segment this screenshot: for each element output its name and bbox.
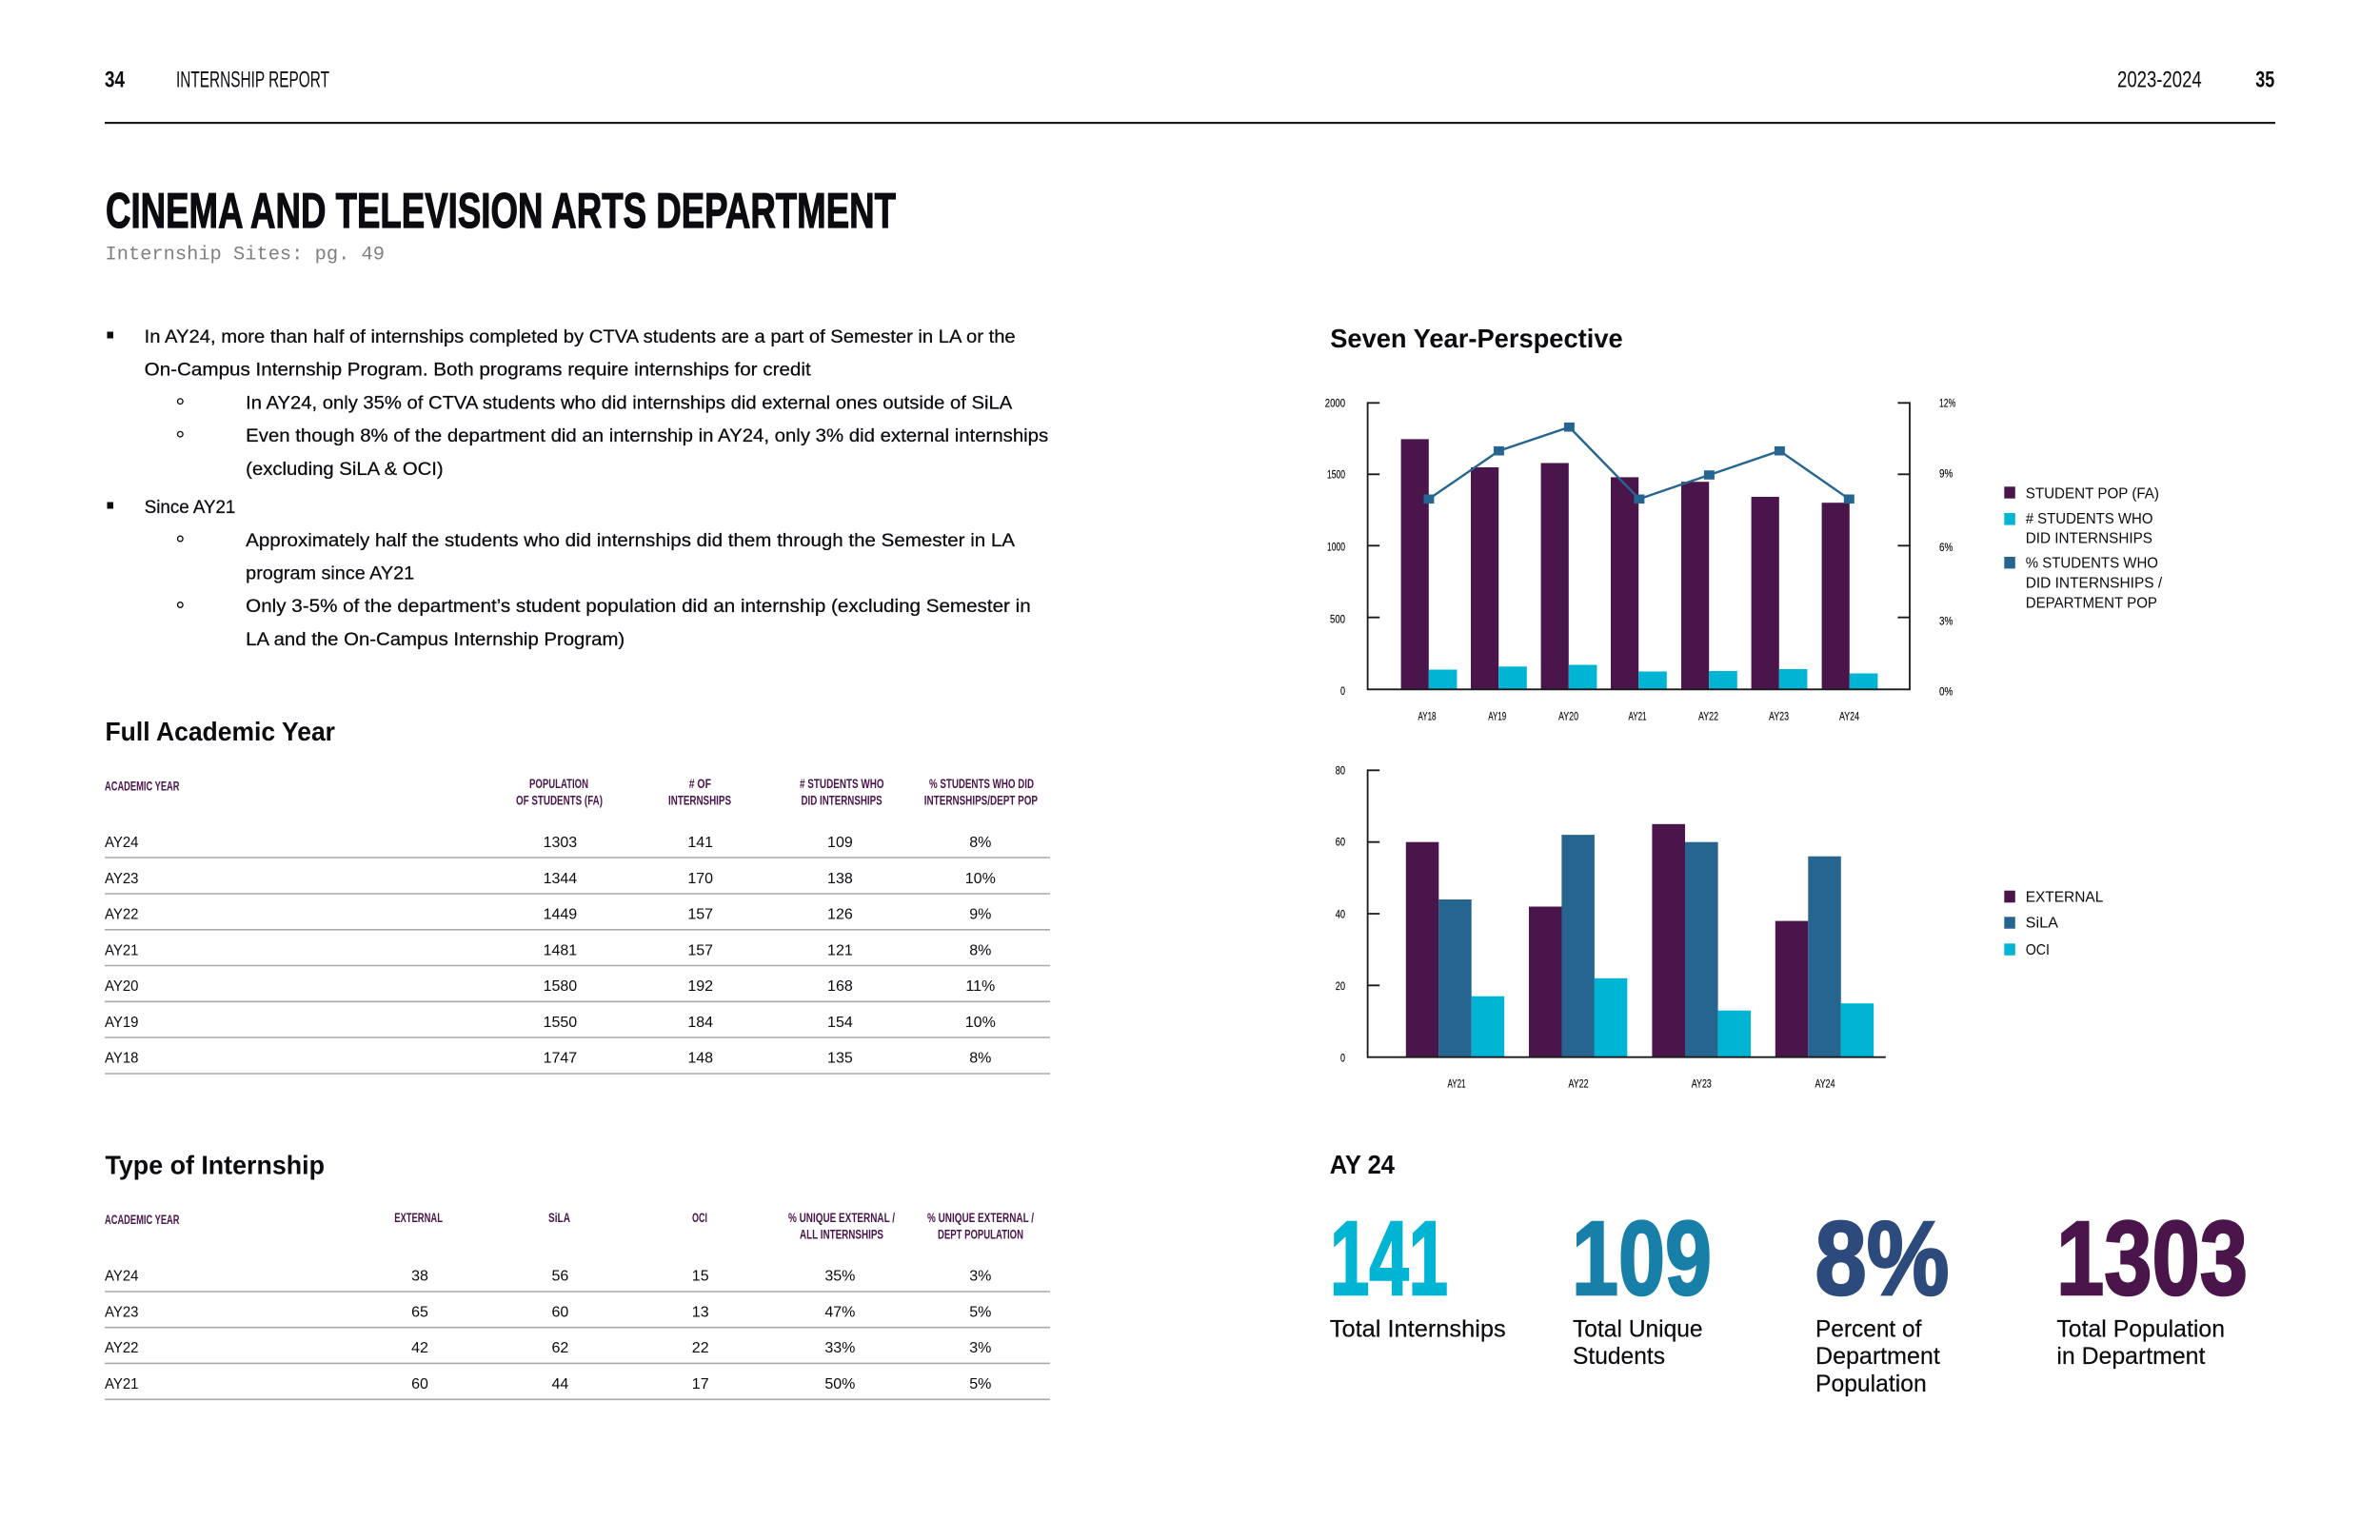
table: type of internship: 3% — [969, 1269, 991, 1285]
table: type of internship: 50% — [824, 1376, 855, 1392]
x axis labels: AY20 — [1558, 712, 1578, 723]
stat: total population in department: 1303 — [2056, 1200, 2248, 1317]
table: full academic year: 168 — [827, 978, 853, 995]
table: full academic year: 8% — [969, 942, 991, 958]
axes — [1368, 403, 1910, 689]
table: type of internship: 33% — [824, 1340, 855, 1356]
y axis labels: 40 — [1336, 909, 1345, 920]
left axis labels: 500 — [1330, 614, 1345, 625]
table: type of internship: % UNIQUE EXTERNAL / — [788, 1211, 895, 1225]
table: full academic year: AY21 — [105, 942, 139, 958]
table: full academic year: 157 — [687, 907, 713, 923]
table: type of internship: 56 — [552, 1269, 568, 1285]
line: percent of students — [1423, 423, 1854, 503]
heading: full academic year: Full Academic Year — [105, 717, 335, 746]
table: full academic year: # STUDENTS WHO — [800, 777, 884, 791]
table: type of internship: EXTERNAL — [394, 1211, 443, 1225]
left axis labels — [1325, 398, 1345, 698]
table: full academic year: OF STUDENTS (FA) — [516, 793, 603, 807]
table: full academic year: 141 — [687, 835, 713, 851]
bullet list: (excluding SiLA & OCI) — [246, 459, 444, 480]
table: type of internship: 22 — [692, 1340, 709, 1356]
subtitle: Internship Sites: pg. 49 — [105, 244, 385, 267]
y axis labels: 80 — [1336, 765, 1345, 777]
legend: seven year chart: % STUDENTS WHO — [2026, 556, 2158, 572]
legend: internship type chart: OCI — [2026, 942, 2050, 958]
table: full academic year: INTERNSHIPS — [668, 793, 731, 807]
table: full academic year: 9% — [969, 907, 991, 923]
table: type of internship: 60 — [552, 1304, 568, 1320]
table: type of internship: OCI — [692, 1211, 707, 1225]
right axis labels: 12% — [1939, 398, 1955, 409]
stat: total unique students: Students — [1573, 1343, 1665, 1370]
legend: internship type chart: EXTERNAL — [2026, 890, 2103, 906]
legend: seven year chart: DID INTERNSHIPS / — [2026, 575, 2163, 591]
table: full academic year: 1344 — [544, 871, 577, 887]
header right — [2117, 67, 2274, 93]
table: full academic year: AY20 — [105, 978, 139, 995]
y axis labels: 20 — [1336, 981, 1345, 993]
table: type of internship: SiLA — [548, 1211, 570, 1225]
table: full academic year: 184 — [687, 1015, 713, 1031]
table: type of internship: AY24 — [105, 1269, 139, 1285]
x axis labels: AY18 — [1418, 712, 1436, 723]
x axis labels: AY23 — [1769, 712, 1789, 723]
y axis labels: 60 — [1336, 838, 1345, 849]
axes — [1368, 770, 1886, 1057]
heading: seven year perspective: Seven Year-Perspective — [1330, 324, 1623, 353]
table: full academic year: 126 — [827, 907, 853, 923]
table: type of internship: ACADEMIC YEAR — [105, 1213, 180, 1227]
bars: OCI — [1472, 978, 1874, 1057]
y axis labels: 0 — [1340, 1054, 1345, 1065]
table: type of internship: 47% — [824, 1304, 855, 1320]
header right: 35 — [2255, 67, 2274, 93]
legend: seven year chart: DID INTERNSHIPS — [2026, 530, 2152, 546]
table: type of internship: AY22 — [105, 1340, 139, 1356]
header left — [105, 67, 329, 93]
table: type of internship: 3% — [969, 1340, 991, 1356]
table: full academic year: 10% — [965, 1015, 996, 1031]
table: full academic year: AY23 — [105, 871, 139, 887]
stat: total population in department — [2056, 1200, 2248, 1370]
legend: seven year chart: # STUDENTS WHO — [2026, 511, 2153, 527]
chart: seven year bars and line — [1325, 398, 1955, 723]
left axis labels: 0 — [1340, 686, 1345, 698]
table: full academic year: 109 — [827, 835, 853, 851]
bullet list: Approximately half the students who did internships did them through the Semester in LA — [246, 530, 1015, 551]
bullet list: program since AY21 — [246, 563, 414, 584]
table: full academic year: 10% — [965, 871, 996, 887]
table: type of internship: % UNIQUE EXTERNAL / — [927, 1211, 1034, 1225]
bullet list: Since AY21 — [145, 497, 235, 518]
table: type of internship: DEPT POPULATION — [938, 1228, 1023, 1241]
table: type of internship: 5% — [969, 1376, 991, 1392]
right axis labels: 9% — [1939, 468, 1953, 480]
table: full academic year: AY19 — [105, 1015, 139, 1031]
x axis labels: AY19 — [1488, 712, 1506, 723]
table: full academic year: 1481 — [544, 942, 577, 958]
table: type of internship: 17 — [692, 1376, 709, 1392]
bullet list — [107, 326, 1048, 650]
bullet list: Only 3-5% of the department’s student population did an internship (excluding Semester in — [246, 596, 1031, 617]
x axis labels — [1418, 712, 1859, 723]
legend: seven year chart: STUDENT POP (FA) — [2026, 485, 2159, 502]
stat: percent of department population: Department — [1815, 1343, 1940, 1370]
left axis labels: 1500 — [1327, 470, 1345, 482]
table: full academic year: AY22 — [105, 907, 139, 923]
table: type of internship: 5% — [969, 1304, 991, 1320]
bullet list: Even though 8% of the department did an internship in AY24, only 3% did external internships — [246, 425, 1048, 446]
table: type of internship: 35% — [824, 1269, 855, 1285]
table: type of internship: AY23 — [105, 1304, 139, 1320]
heading: type of internship: Type of Internship — [105, 1150, 325, 1180]
left axis labels: 2000 — [1325, 398, 1345, 409]
stat: total unique students — [1572, 1200, 1712, 1370]
table: full academic year: 170 — [687, 871, 713, 887]
legend: seven year chart — [2004, 485, 2163, 611]
table: full academic year: AY18 — [105, 1051, 139, 1067]
table: type of internship: AY21 — [105, 1376, 139, 1392]
x axis labels: AY24 — [1839, 712, 1859, 723]
table: full academic year: 192 — [687, 978, 713, 995]
stat: total internships: Total Internships — [1330, 1315, 1506, 1342]
table: full academic year: 138 — [827, 871, 853, 887]
right axis labels: 3% — [1939, 617, 1953, 628]
table: full academic year: AY24 — [105, 835, 139, 851]
stat: percent of department population: 8% — [1815, 1200, 1950, 1317]
table: full academic year: 157 — [687, 942, 713, 958]
table: full academic year: 8% — [969, 1051, 991, 1067]
table: full academic year: 1449 — [544, 907, 577, 923]
table: full academic year: 1580 — [544, 978, 577, 995]
chart: internship type bars — [1336, 765, 1886, 1090]
table: full academic year: 11% — [965, 978, 995, 995]
table: type of internship: 60 — [411, 1376, 428, 1392]
stat: total population in department: in Department — [2056, 1343, 2205, 1370]
table: type of internship: 13 — [692, 1304, 709, 1320]
table: full academic year — [105, 777, 1050, 1074]
bars: SiLA — [1438, 835, 1841, 1057]
legend: internship type chart: SiLA — [2026, 915, 2058, 931]
table: full academic year: 1550 — [544, 1015, 577, 1031]
stat: percent of department population: Percent of — [1815, 1315, 1921, 1342]
bars: external — [1406, 824, 1808, 1057]
table: full academic year: 8% — [969, 835, 991, 851]
left axis labels: 1000 — [1327, 542, 1345, 553]
table: full academic year: INTERNSHIPS/DEPT POP — [924, 793, 1038, 807]
stat: percent of department population — [1815, 1200, 1950, 1397]
bullet list: In AY24, more than half of internships completed by CTVA students are a part of Semester in LA or the — [145, 326, 1016, 347]
title: CINEMA AND TELEVISION ARTS DEPARTMENT — [106, 183, 896, 238]
x axis labels: AY24 — [1815, 1078, 1835, 1090]
table: full academic year: 121 — [827, 942, 853, 958]
x axis labels: AY22 — [1569, 1078, 1588, 1090]
table: full academic year: DID INTERNSHIPS — [802, 793, 883, 807]
stat: total population in department: Total Population — [2056, 1315, 2225, 1342]
table: full academic year: 148 — [687, 1051, 713, 1067]
header left: INTERNSHIP REPORT — [176, 67, 329, 93]
y axis labels — [1336, 765, 1345, 1065]
x axis labels: AY23 — [1692, 1078, 1712, 1090]
table: type of internship: 42 — [411, 1340, 428, 1356]
table: type of internship: 44 — [552, 1376, 568, 1392]
table: full academic year: ACADEMIC YEAR — [105, 779, 180, 793]
bullet list: In AY24, only 35% of CTVA students who did internships did external ones outside of SiLA — [246, 392, 1012, 413]
stat: total unique students: 109 — [1572, 1200, 1712, 1317]
x axis labels — [1447, 1078, 1835, 1090]
x axis labels: AY21 — [1447, 1078, 1466, 1090]
table: full academic year: 154 — [827, 1015, 853, 1031]
legend: internship type chart — [2004, 890, 2103, 958]
right axis labels: 0% — [1939, 687, 1953, 699]
table: type of internship: 15 — [692, 1269, 709, 1285]
header left: 34 — [105, 67, 126, 93]
x axis labels: AY21 — [1628, 712, 1647, 723]
table: type of internship: 62 — [552, 1340, 568, 1356]
bars: students who did internships — [1429, 664, 1877, 689]
table: full academic year: # OF — [689, 777, 711, 791]
stat: total internships: 141 — [1330, 1200, 1448, 1317]
header right: 2023-2024 — [2117, 67, 2202, 93]
table: type of internship — [105, 1211, 1050, 1399]
table: full academic year: % STUDENTS WHO DID — [929, 777, 1034, 791]
table: full academic year: 1303 — [544, 835, 577, 851]
x axis labels: AY22 — [1698, 712, 1718, 723]
table: type of internship: 38 — [411, 1269, 428, 1285]
table: full academic year: 135 — [827, 1051, 853, 1067]
table: type of internship: 65 — [411, 1304, 428, 1320]
table: full academic year: 1747 — [544, 1051, 577, 1067]
stat: percent of department population: Population — [1815, 1371, 1927, 1397]
heading: AY 24: AY 24 — [1330, 1150, 1395, 1179]
table: type of internship: ALL INTERNSHIPS — [800, 1228, 883, 1241]
bars: student population — [1401, 439, 1850, 689]
table: full academic year: POPULATION — [529, 777, 588, 791]
legend: seven year chart: DEPARTMENT POP — [2026, 595, 2157, 611]
right axis labels: 6% — [1939, 543, 1953, 554]
bullet list: On-Campus Internship Program. Both programs require internships for credit — [145, 360, 811, 381]
bullet list: LA and the On-Campus Internship Program) — [246, 629, 625, 650]
right axis labels — [1939, 398, 1955, 699]
stat: total unique students: Total Unique — [1573, 1315, 1703, 1342]
